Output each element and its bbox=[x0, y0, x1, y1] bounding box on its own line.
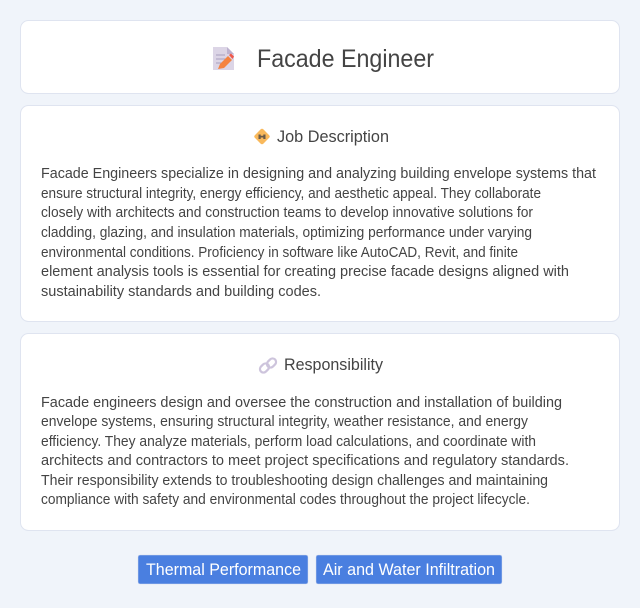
text block: responsibility: efficiency. They analyze materials, perform load calculations, and coordinate with bbox=[41, 434, 536, 450]
text block: job description: environmental conditions. Proficiency in software like AutoCAD, Revit, and finite bbox=[41, 245, 518, 261]
icon: orange diamond bbox=[254, 128, 270, 145]
text block: responsibility: Facade engineers design and oversee the construction and installation of building bbox=[41, 395, 562, 411]
tag: air and water infiltration bbox=[316, 555, 502, 584]
text block: responsibility: Their responsibility extends to troubleshooting design challenges and maintaining bbox=[41, 473, 548, 489]
text block: responsibility: compliance with safety and environmental codes throughout the project lifecycle. bbox=[41, 492, 530, 508]
panel: responsibility bbox=[20, 334, 620, 530]
text block: job description: element analysis tools is essential for creating precise facade designs aligned with bbox=[41, 264, 569, 280]
icon: chain link bbox=[258, 357, 278, 374]
panel: title card bbox=[20, 20, 620, 94]
text block: job description: sustainability standards and building codes. bbox=[41, 284, 321, 300]
heading: job description: Job Description bbox=[277, 127, 389, 146]
tag: air and water infiltration: Air and Water Infiltration bbox=[323, 560, 495, 579]
tag: thermal performance bbox=[138, 555, 308, 584]
text block: job description: ensure structural integrity, energy efficiency, and aesthetic appeal. They collaborate bbox=[41, 186, 541, 202]
text block: responsibility bbox=[41, 395, 569, 508]
text block: responsibility: architects and contractors to meet project specifications and regulatory standards. bbox=[41, 453, 569, 469]
title: Facade Engineer bbox=[257, 46, 434, 73]
text block: job description: Facade Engineers specialize in designing and analyzing building envelope systems that bbox=[41, 166, 596, 182]
text block: responsibility: envelope systems, ensuring structural integrity, weather resistance, and energy bbox=[41, 414, 529, 430]
heading: responsibility: Responsibility bbox=[284, 355, 384, 374]
text block: job description: cladding, glazing, and insulation materials, optimizing performance under varying bbox=[41, 225, 532, 241]
text block: job description: closely with architects and construction teams to develop innovative solutions for bbox=[41, 205, 533, 221]
icon: document with pencil bbox=[213, 47, 234, 70]
tag: thermal performance: Thermal Performance bbox=[146, 560, 301, 579]
panel: job description bbox=[20, 106, 620, 322]
text block: job description bbox=[41, 166, 596, 300]
